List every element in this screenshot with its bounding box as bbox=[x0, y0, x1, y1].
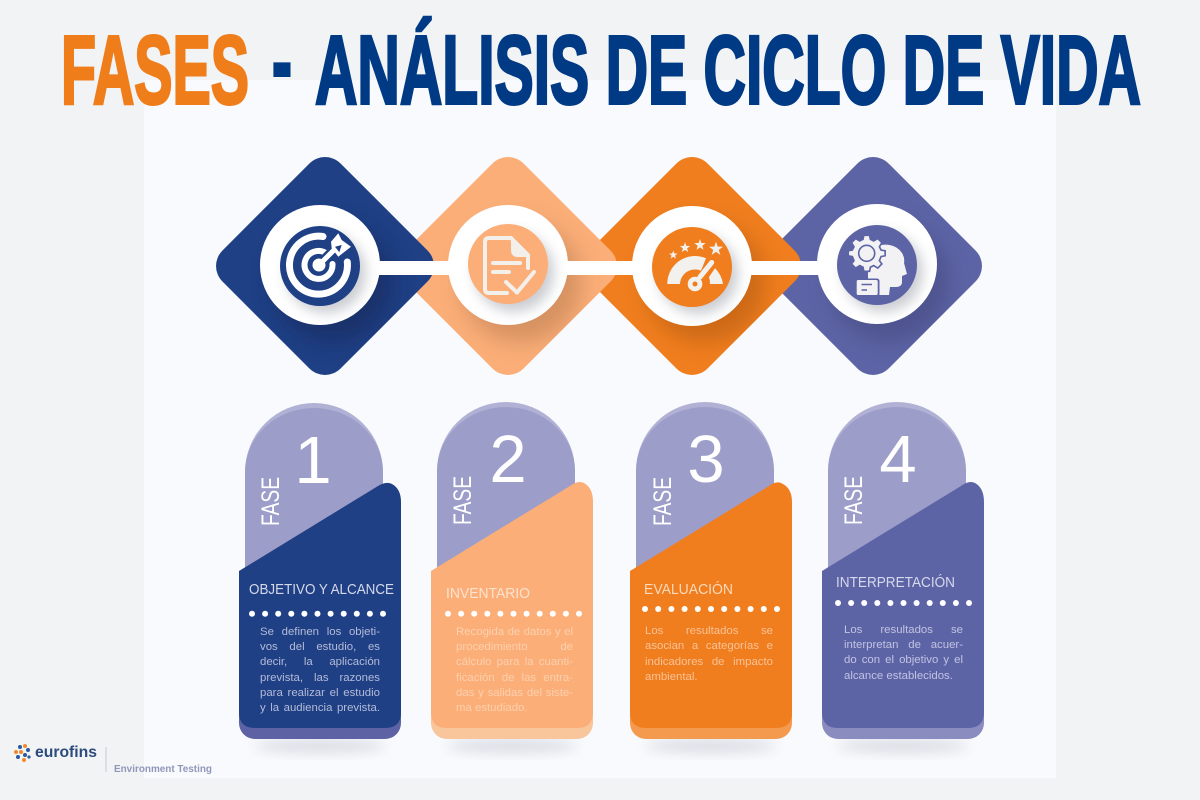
logo wordmark: eurofins bbox=[35, 744, 97, 761]
card body 1 bbox=[239, 483, 401, 728]
body text 4: interpretan de acuer- bbox=[844, 639, 963, 651]
background panel bbox=[144, 80, 1056, 778]
heading: objetivo y alcance: OBJETIVO Y ALCANCE bbox=[249, 582, 394, 598]
logo separator bbox=[106, 747, 107, 772]
body text 3 bbox=[645, 624, 773, 688]
title: FASES bbox=[61, 16, 249, 124]
body text 4 bbox=[844, 622, 963, 686]
body text 1: Se definen los objeti- bbox=[260, 626, 380, 638]
heading: interpretación: INTERPRETACIÓN bbox=[836, 574, 955, 591]
body text 3: Los resultados se bbox=[645, 625, 773, 637]
body text 3: asocian a categorías e bbox=[645, 640, 773, 652]
diamond: phase 4 bbox=[782, 157, 982, 375]
label FASE 3: FASE bbox=[649, 477, 677, 526]
title: - bbox=[272, 7, 292, 116]
card body 3 bbox=[630, 482, 792, 728]
body text 2: ma estudiado. bbox=[456, 702, 528, 714]
card base 2 bbox=[431, 680, 593, 739]
dotted divider 1 bbox=[249, 611, 386, 617]
card: fase 2 bbox=[431, 402, 593, 753]
body text 3: ambiental. bbox=[645, 671, 698, 683]
body text 4: alcance establecidos. bbox=[844, 670, 953, 682]
arch: fase 2 bbox=[437, 402, 575, 575]
icon node 4: head with gear bbox=[817, 204, 937, 324]
body text 4: do con el objetivo y el bbox=[844, 654, 963, 666]
body text 2: ficación de las entra- bbox=[456, 672, 573, 684]
dotted divider 2 bbox=[445, 611, 582, 617]
diamond: phase 2 bbox=[416, 157, 616, 375]
body text 4: Los resultados se bbox=[844, 624, 963, 636]
card: fase 3 bbox=[630, 402, 792, 753]
card base 3 bbox=[630, 680, 792, 739]
body text 3: indicadores de impacto bbox=[645, 656, 773, 668]
card base 4 bbox=[822, 680, 984, 739]
heading: evaluación: EVALUACIÓN bbox=[644, 581, 733, 598]
body text 2: Recogida de datos y el bbox=[456, 626, 573, 638]
number 4: 4 bbox=[879, 422, 917, 497]
body text 2: procedimiento de bbox=[456, 641, 573, 653]
body text 1: y la audiencia prevista. bbox=[260, 702, 380, 714]
heading: inventario: INVENTARIO bbox=[446, 586, 530, 602]
body text 1: prevista, las razones bbox=[260, 672, 380, 684]
dotted divider 4 bbox=[835, 600, 972, 606]
logo tagline: Environment Testing bbox=[114, 763, 212, 775]
icon node 2: document check bbox=[448, 205, 568, 325]
diamond: phase 3 bbox=[600, 157, 800, 375]
number 1: 1 bbox=[294, 423, 332, 498]
number 3: 3 bbox=[687, 422, 725, 497]
label FASE 4: FASE bbox=[840, 476, 868, 525]
body text 2: cálculo para la cuanti- bbox=[456, 656, 573, 668]
label FASE 1: FASE bbox=[257, 477, 285, 526]
card body 2 bbox=[431, 482, 593, 728]
body text 1: vos del estudio, es bbox=[260, 641, 380, 653]
number 2: 2 bbox=[489, 422, 527, 497]
card: fase 1 bbox=[239, 403, 401, 753]
connector band bbox=[370, 261, 830, 275]
body text 1 bbox=[260, 624, 380, 720]
arch: fase 1 bbox=[245, 403, 383, 575]
title bbox=[61, 7, 1141, 124]
arch: fase 3 bbox=[636, 402, 774, 575]
arch: fase 4 bbox=[828, 402, 966, 575]
card: fase 4 bbox=[822, 402, 984, 753]
body text 2 bbox=[456, 624, 573, 720]
logo: eurofins bbox=[14, 744, 212, 775]
icon node 3: gauge and stars bbox=[632, 206, 752, 326]
body text 2: das y salidas del siste- bbox=[456, 687, 573, 699]
body text 1: decir, la aplicación bbox=[260, 656, 380, 668]
icon node 1: target bbox=[260, 205, 380, 325]
diamond: phase 1 bbox=[216, 157, 434, 375]
dotted divider 3 bbox=[642, 606, 780, 612]
label FASE 2: FASE bbox=[449, 476, 477, 525]
card body 4 bbox=[822, 482, 984, 728]
body text 1: para realizar el estudio bbox=[260, 687, 380, 699]
logo mark bbox=[14, 744, 31, 762]
card base 1 bbox=[239, 680, 401, 739]
